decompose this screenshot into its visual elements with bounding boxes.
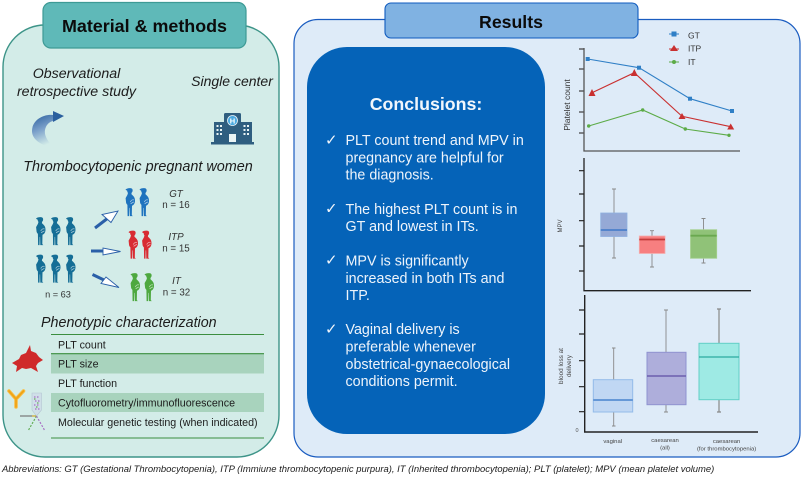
panel: conclusions <box>307 47 545 434</box>
icon: cohort of pregnant women <box>36 217 76 283</box>
conclusion 2 <box>325 200 517 235</box>
arrow: to GT <box>95 211 118 228</box>
heading: conclusions: Conclusions: <box>370 94 482 114</box>
axis categories: caesarean <box>713 439 740 445</box>
icon: IT group <box>130 273 154 301</box>
text: single center: Single center <box>191 73 274 89</box>
conclusion 3 <box>325 252 505 304</box>
icon: flow cytometry tube <box>20 393 45 431</box>
icon: hospital <box>211 113 254 144</box>
table: phenotypic tests: Molecular genetic testing (when indicated) <box>58 417 258 429</box>
axis categories: (for thrombocytopenia) <box>697 446 756 452</box>
conclusion 2: The highest PLT count is in <box>346 202 517 218</box>
arrow: to ITP <box>91 248 120 255</box>
legend: ITP <box>688 44 702 54</box>
label: ITP count: ITP <box>168 232 184 243</box>
icon: platelet <box>12 345 43 372</box>
conclusion 3: ITP. <box>346 288 370 304</box>
conclusion 1: PLT count trend and MPV in <box>346 133 524 149</box>
conclusion 4: ✓ <box>325 321 338 338</box>
table: phenotypic tests: PLT size <box>58 358 99 370</box>
heading: results: Results <box>479 12 543 32</box>
label: GT count: n = 16 <box>162 200 190 211</box>
table: phenotypic tests <box>51 334 264 438</box>
axis categories: caesarean <box>651 438 679 444</box>
axis zero: 0 <box>575 428 579 434</box>
conclusion 4 <box>325 321 510 390</box>
text: study type: retrospective study <box>17 84 137 100</box>
legend: IT <box>688 57 696 67</box>
conclusion 3: MPV is significantly <box>346 254 470 270</box>
conclusion 4: Vaginal delivery is <box>346 322 460 338</box>
table: phenotypic tests: Cytofluorometry/immunofluorescence <box>58 398 235 410</box>
box: GT <box>601 189 627 258</box>
conclusion 2: ✓ <box>325 200 338 218</box>
box plot: MPV <box>558 158 751 291</box>
conclusion 1: ✓ <box>325 132 338 149</box>
axis categories: vaginal <box>603 439 622 445</box>
label: GT count: GT <box>169 189 184 200</box>
heading: material and methods: Material & methods <box>62 16 227 36</box>
panel: material and methods <box>3 2 279 457</box>
icon: GT group <box>126 188 149 216</box>
table: phenotypic tests: PLT function <box>58 378 117 390</box>
label: ITP count: n = 15 <box>162 244 190 254</box>
axis label: blood loss: delivery <box>566 354 573 377</box>
footer: abbreviations: Abbreviations: GT (Gestational Thrombocytopenia), ITP (Immiune thrombocytopenic purpura), IT (Inherited thrombocytopenia); PLT (platelet); MPV (mean platelet volume) <box>1 464 714 475</box>
conclusion 1: the diagnosis. <box>346 168 434 184</box>
heading: phenotypic characterization: Phenotypic characterization <box>41 315 217 331</box>
axis label: platelet count: Platelet count <box>562 79 572 131</box>
series: GT <box>586 57 734 113</box>
text: study type: Observational <box>33 66 121 82</box>
icon: antibody <box>9 391 24 407</box>
axis categories: (all) <box>660 446 670 452</box>
box: caesarean for thrombocytopenia <box>699 309 739 412</box>
box: ITP <box>639 231 665 267</box>
box: IT <box>690 218 717 263</box>
conclusion 4: obstetrical-gynaecological <box>346 357 510 373</box>
icon: ITP group <box>128 231 152 259</box>
axis label: MPV: MPV <box>558 219 564 233</box>
conclusion 3: increased in both ITs and <box>346 271 505 287</box>
label: total n: n = 63 <box>45 290 71 300</box>
label: GT count <box>162 189 190 211</box>
line chart: platelet count <box>562 30 740 151</box>
label: IT count: IT <box>172 276 182 287</box>
axis label: blood loss: blood loss at <box>558 348 565 384</box>
conclusion 3: ✓ <box>325 252 338 269</box>
series: ITP <box>588 69 734 130</box>
conclusion 1 <box>325 132 524 184</box>
icon: curved arrow <box>32 111 64 148</box>
conclusion 4: preferable whenever <box>346 340 476 356</box>
icon: hospital: H <box>230 116 235 125</box>
heading: results <box>385 3 638 38</box>
text: thrombocytopenic pregnant women: Thrombocytopenic pregnant women <box>23 159 253 175</box>
conclusion 4: conditions permit. <box>346 374 458 390</box>
box: vaginal <box>593 348 633 426</box>
legend: GT <box>688 30 700 40</box>
axis categories <box>603 438 756 452</box>
table: phenotypic tests: PLT count <box>58 340 106 352</box>
arrow: to IT <box>92 274 119 288</box>
label: ITP count <box>162 232 190 254</box>
label: IT count <box>163 276 190 298</box>
legend <box>669 30 702 67</box>
conclusion 1: pregnancy are helpful for <box>346 150 504 166</box>
conclusion 2: GT and lowest in ITs. <box>346 219 479 235</box>
label: IT count: n = 32 <box>163 288 190 298</box>
box: caesarean all <box>647 310 686 412</box>
panel: results <box>294 3 800 457</box>
box plot: blood loss at delivery <box>558 295 758 452</box>
heading: material and methods <box>43 2 246 48</box>
series: IT <box>587 108 731 137</box>
